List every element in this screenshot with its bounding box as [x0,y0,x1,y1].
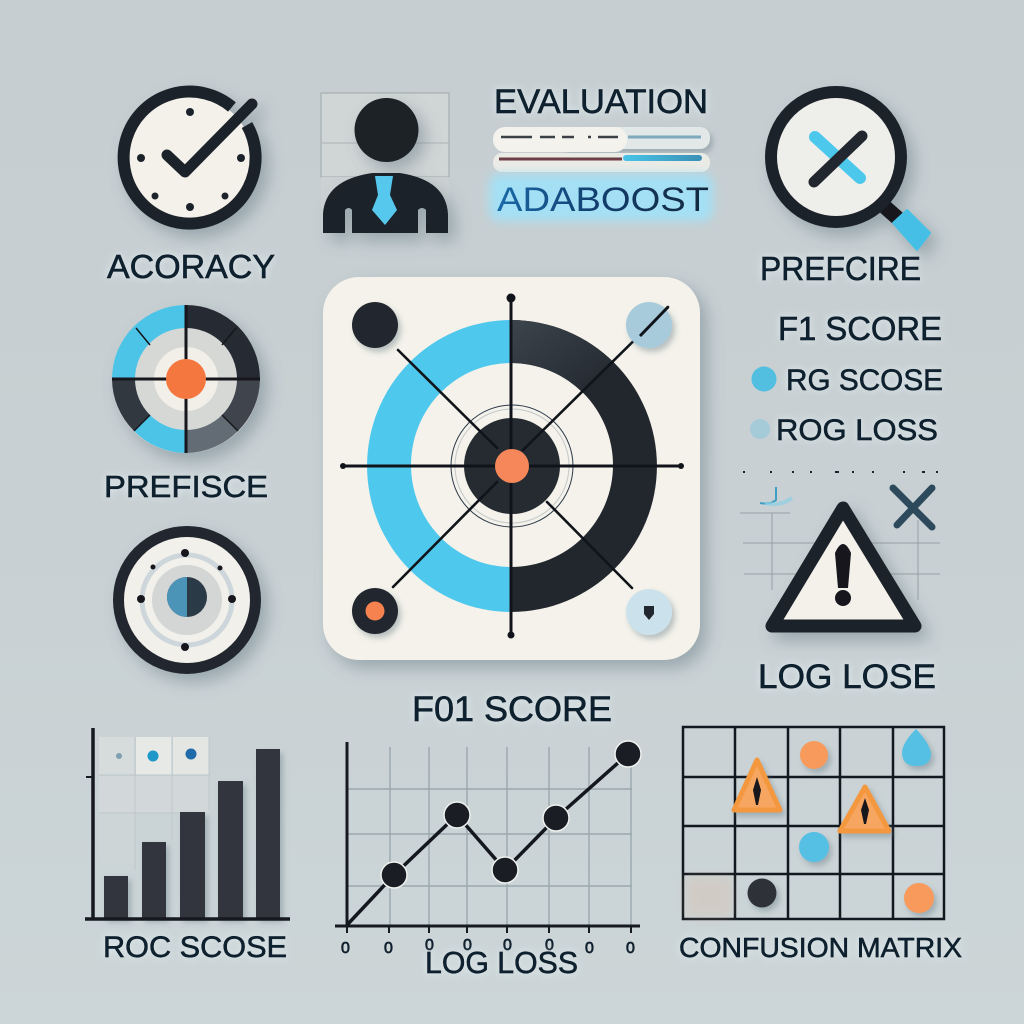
axis ticks: 0 [384,940,393,957]
crosshair lines [343,298,681,635]
icon: clock with checkmark [124,92,256,224]
axis ticks: 0 [341,940,350,957]
axis ticks: 0 [463,937,472,954]
heading: evaluation: EVALUATION [494,83,708,121]
label: accuracy: ACORACY [107,248,275,285]
label: confusion matrix: CONFUSION MATRIX [679,932,962,963]
legend: rog scose: RG SCOSE [786,364,943,397]
icon: segmented target [112,305,260,453]
warning marker [734,760,780,810]
line chart [335,741,641,957]
axis ticks: 0 [545,937,554,954]
axis ticks: 0 [585,940,594,957]
label: precire: PREFCIRE [760,250,921,287]
icon: person with tie [321,93,449,233]
centre dot [495,449,529,483]
bar chart [85,728,290,919]
label: f01 score: F01 SCORE [412,690,612,729]
adaboost badge: ADABOOST [497,181,709,219]
corner marker: top right [626,302,672,348]
corner marker: top left [352,302,398,348]
ring chart [367,320,657,612]
corner marker: bottom left [352,588,398,634]
icon: warning triangle on grid [740,472,940,626]
evaluation bars [493,127,710,172]
panel: central target card [323,277,700,660]
axis ticks [341,937,635,957]
warning marker [840,787,889,831]
target centre [451,405,573,527]
label: prefisce: PREFISCE [104,469,268,504]
axis ticks: 0 [626,940,635,957]
corner marker: bottom right [626,589,672,635]
label: log loss: LOG LOSS [425,945,578,980]
label: log lose: LOG LOSE [758,658,936,696]
adaboost badge [489,174,713,221]
markers [748,729,934,913]
axis ticks: 0 [503,937,512,954]
legend: f1 score: F1 SCORE [778,310,942,347]
legend: rog loss: ROG LOSS [776,414,938,447]
icon: magnifier with x [771,92,930,250]
icon: dial [118,532,256,668]
confusion matrix [683,727,944,919]
label: roc scose: ROC SCOSE [103,931,287,964]
axis ticks: 0 [425,937,434,954]
